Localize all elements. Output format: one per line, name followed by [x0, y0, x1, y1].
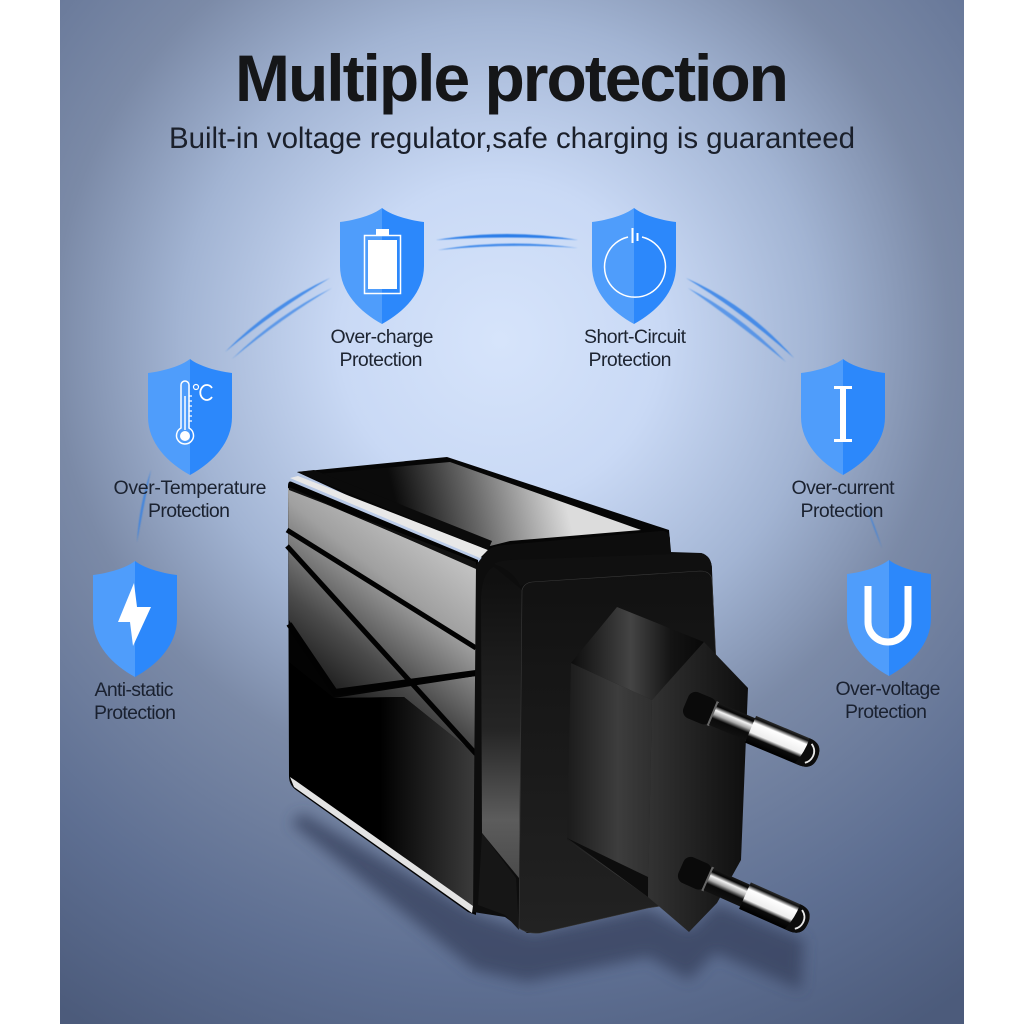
shield: over-charge: [340, 208, 424, 324]
label: over-current: Over-current: [792, 477, 895, 499]
subtitle: Built-in voltage regulator,safe charging is guaranteed: [169, 122, 855, 155]
icon: letter I: [834, 386, 852, 442]
label: over-voltage: Over-voltage: [836, 678, 940, 700]
pin: upper: [680, 689, 824, 771]
label: over-charge second line: Protection: [340, 349, 422, 371]
label: over-voltage second line: Protection: [845, 701, 927, 723]
plug upper facet: [571, 607, 704, 700]
icon: lightning: [118, 583, 151, 646]
label: over-temperature: Over-Temperature: [114, 477, 266, 499]
charger front face: [519, 571, 716, 933]
icon: power: [604, 228, 666, 297]
icon: battery: [364, 229, 400, 294]
connecting arcs: [137, 234, 882, 548]
label: short-circuit second line: Protection: [588, 349, 672, 371]
shield: short-circuit: [592, 208, 676, 324]
euro plug: [567, 607, 748, 932]
charger shadow: [291, 813, 804, 990]
plug left facet: [567, 663, 652, 897]
shield: anti-static: [93, 561, 177, 677]
shield: over-current: [801, 359, 885, 475]
charger illustration: [287, 457, 824, 937]
icon: letter U: [868, 586, 908, 642]
charger collar: [473, 531, 716, 933]
label: short-circuit: Short-Circuit: [584, 326, 687, 348]
shield: over-temperature: [148, 359, 232, 475]
label: anti-static second line: Protection: [94, 702, 176, 724]
icon: thermometer: [177, 381, 212, 444]
shield: over-voltage: [847, 560, 931, 676]
label: over-charge: Over-charge: [330, 326, 434, 348]
plug right facet: [648, 642, 748, 932]
title: Multiple protection: [235, 41, 789, 115]
reflection lines: [287, 530, 476, 754]
label: over-current second line: Protection: [800, 500, 884, 522]
charger side face: [287, 482, 478, 915]
pin: lower: [675, 854, 814, 937]
label: anti-static: Anti-static: [94, 679, 174, 701]
charger top face: [290, 457, 671, 560]
label: over-temperature second line: Protection: [148, 500, 230, 522]
